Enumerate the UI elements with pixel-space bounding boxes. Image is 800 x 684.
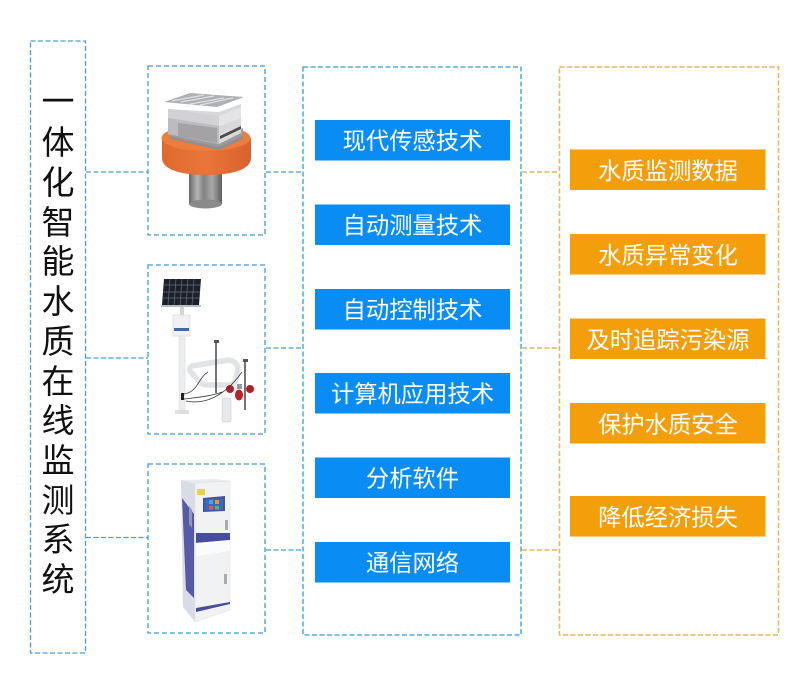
icon: solar monitoring station	[161, 279, 254, 422]
icon: water quality buoy	[162, 93, 251, 208]
bar: communication network	[315, 542, 510, 582]
bar: automatic control: 自动控制技术	[343, 297, 482, 323]
bar: automatic measurement	[315, 204, 510, 245]
title: vertical heading: 统	[42, 561, 74, 598]
title: vertical heading	[42, 83, 74, 598]
bar: water quality data	[570, 150, 766, 190]
bar: analysis software: 分析软件	[366, 466, 459, 492]
title: vertical heading: 测	[42, 482, 74, 519]
panel: outcomes	[560, 67, 778, 635]
connectors: technologies to outcomes	[522, 172, 559, 550]
connectors: title to devices	[86, 172, 148, 538]
bar: water quality anomalies	[570, 234, 766, 274]
title: vertical heading: 智	[42, 204, 74, 241]
bar: modern sensing: 现代传感技术	[343, 128, 482, 154]
title: vertical heading: 监	[42, 442, 74, 479]
title: vertical heading: 线	[42, 402, 74, 439]
bar: analysis software	[315, 458, 510, 498]
bar: modern sensing	[315, 120, 510, 160]
title: vertical heading: 一	[42, 83, 74, 120]
title: vertical heading: 化	[42, 164, 74, 201]
title: vertical heading: 系	[42, 521, 74, 558]
connectors: devices to technologies	[266, 172, 303, 550]
bar: computer application	[315, 373, 510, 414]
title: vertical heading: 体	[42, 124, 74, 161]
bar: automatic measurement: 自动测量技术	[343, 212, 482, 238]
bar: reduce economic losses	[570, 496, 766, 536]
panel: solar-powered monitoring station	[148, 265, 265, 434]
title: vertical heading: 在	[42, 363, 74, 400]
bar: communication network: 通信网络	[366, 550, 459, 576]
bar: trace pollution sources: 及时追踪污染源	[586, 327, 750, 353]
panel: cabinet device	[148, 464, 265, 633]
bar: protect water quality: 保护水质安全	[598, 412, 738, 438]
bar: water quality anomalies: 水质异常变化	[598, 242, 738, 268]
title: vertical heading: 水	[42, 283, 74, 320]
bar: protect water quality	[570, 403, 766, 444]
icon: water quality analyser cabinet	[181, 479, 230, 622]
panel: technologies	[303, 67, 521, 635]
title: vertical heading: 能	[42, 243, 74, 280]
bar: trace pollution sources	[570, 318, 766, 359]
panel: system title	[30, 41, 86, 653]
bar: computer application: 计算机应用技术	[331, 381, 494, 407]
panel: buoy device	[148, 66, 265, 235]
title: vertical heading: 质	[42, 323, 74, 360]
bar: automatic control	[315, 289, 510, 330]
bar: reduce economic losses: 降低经济损失	[598, 504, 738, 530]
bar: water quality data: 水质监测数据	[598, 158, 738, 184]
